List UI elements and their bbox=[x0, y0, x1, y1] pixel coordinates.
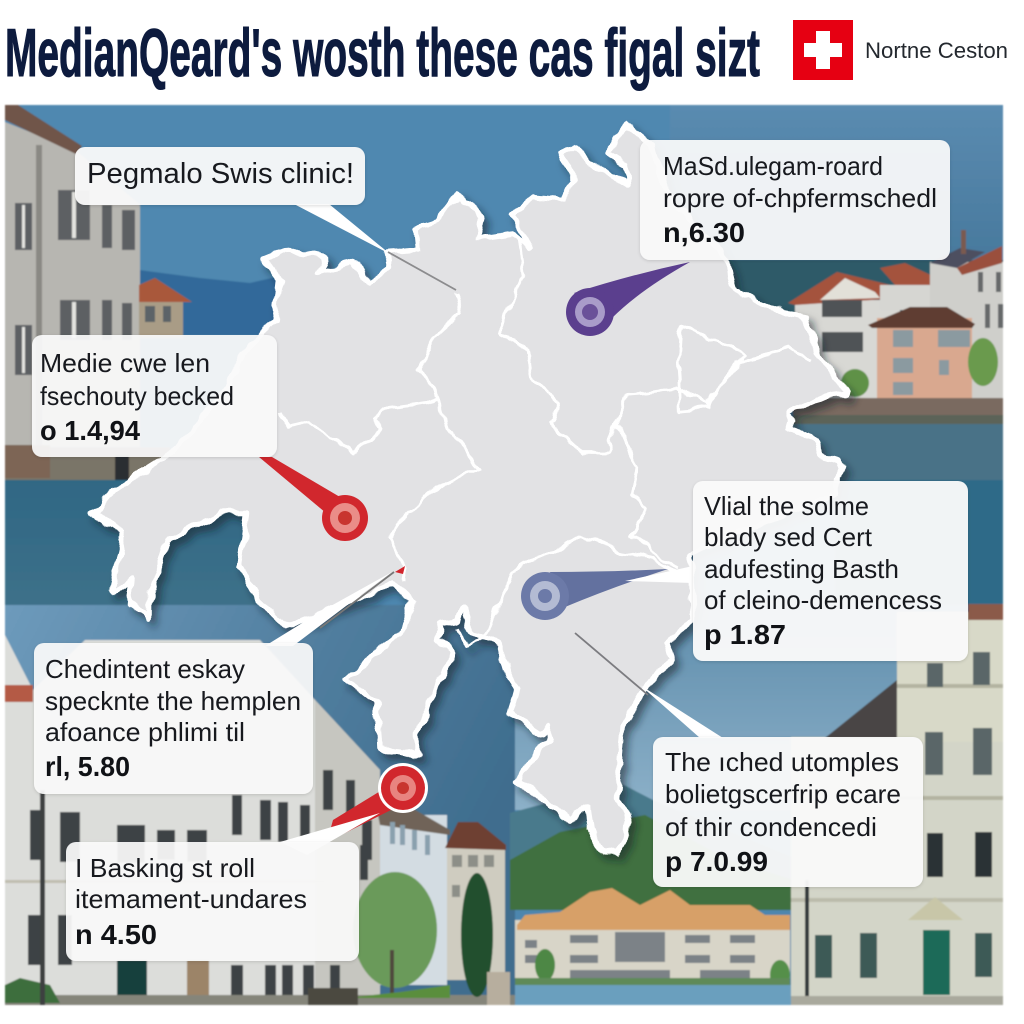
callout: south east: of thir condencedi bbox=[665, 812, 877, 842]
callout: west: Medie cwe len bbox=[40, 348, 210, 378]
building bottom right bbox=[791, 604, 1003, 1005]
strip right bbox=[835, 480, 1003, 605]
callout: east: p 1.87 bbox=[704, 619, 786, 650]
callout: south: itemament-undares bbox=[75, 884, 307, 914]
logo text: Nortne Ceston bbox=[865, 38, 1008, 63]
callout: south east: The ıched utomples bbox=[665, 747, 899, 777]
lake top right bbox=[790, 424, 1003, 480]
callout: south west: Chedintent eskay bbox=[45, 654, 245, 684]
sky bottom left bbox=[5, 605, 515, 1005]
callout: west: fsechouty becked bbox=[40, 381, 234, 411]
forest and hill bbox=[510, 783, 800, 910]
callout: north east: MaSd.ulegam-roard bbox=[663, 151, 883, 181]
callout: south: n 4.50 bbox=[75, 919, 157, 950]
callout: east: adufesting Basth bbox=[704, 554, 899, 584]
callout: south east bbox=[653, 737, 923, 887]
tower top left bbox=[139, 278, 192, 338]
callout: clinic label: Pegmalo Swis clinic! bbox=[87, 158, 354, 190]
strip left bbox=[5, 480, 315, 605]
pointer: lower right bbox=[575, 633, 723, 738]
callout: south: I Basking st roll bbox=[75, 853, 255, 883]
buildings bottom left bbox=[5, 635, 515, 1005]
callout: south east: bolietgscerfrip ecare bbox=[665, 779, 901, 809]
icon: Swiss flag bbox=[793, 20, 853, 80]
palace on the lake bbox=[515, 888, 790, 990]
callout: south west: specknte the hemplen bbox=[45, 686, 301, 716]
lake bottom bbox=[515, 985, 793, 1005]
callout: south east: p 7.0.99 bbox=[665, 846, 768, 877]
callout: clinic label bbox=[75, 147, 365, 205]
town top right bbox=[725, 230, 1003, 424]
pointer: clinic label bbox=[294, 204, 456, 290]
callout: south west bbox=[34, 643, 313, 794]
callout: south west: rl, 5.80 bbox=[45, 751, 130, 782]
map of Switzerland bbox=[93, 125, 847, 853]
sky bottom right bbox=[515, 600, 915, 810]
hills top left bbox=[139, 270, 285, 335]
callout: north east: ropre of-chpfermschedl bbox=[663, 183, 937, 213]
callout: east: Vlial the solme bbox=[704, 491, 869, 521]
callout: east: of cleino-demencess bbox=[704, 585, 942, 615]
callout: east: blady sed Cert bbox=[704, 522, 873, 552]
callout: west bbox=[32, 335, 277, 457]
pin: purple bbox=[566, 262, 690, 336]
callout: west: o 1.4,94 bbox=[40, 415, 140, 446]
pin: blue bbox=[521, 566, 693, 620]
pin: red west bbox=[259, 457, 368, 541]
building top left bbox=[5, 105, 170, 480]
pointer: lower left bbox=[265, 566, 405, 646]
callout: east bbox=[693, 481, 968, 661]
callout: south west: afoance phlimi til bbox=[45, 717, 245, 747]
callout: north east: n,6.30 bbox=[663, 217, 745, 248]
pin: red south bbox=[280, 763, 428, 855]
callout: south bbox=[66, 842, 359, 961]
canton borders bbox=[282, 239, 811, 647]
callout: north east bbox=[640, 140, 950, 260]
trees bottom left bbox=[5, 790, 510, 1005]
